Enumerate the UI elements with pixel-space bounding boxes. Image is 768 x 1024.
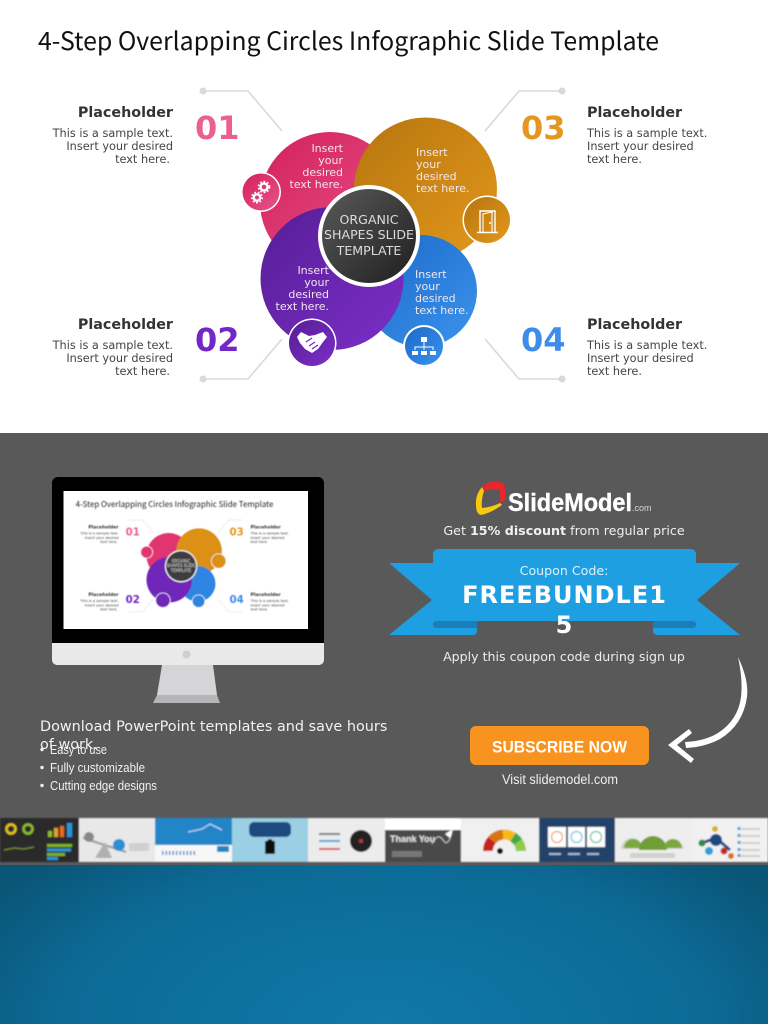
subscribe button bbox=[470, 726, 649, 765]
pink circle text: text here. bbox=[290, 178, 343, 191]
subscribe button: SUBSCRIBE NOW bbox=[492, 738, 628, 756]
thumbnail: thank you: Thank You bbox=[390, 834, 435, 844]
connector lines bbox=[200, 88, 566, 382]
thumbnail: percent cards bbox=[539, 818, 615, 862]
monitor screen slide: text here. bbox=[100, 540, 118, 544]
download heading: Download PowerPoint templates and save hours bbox=[40, 719, 387, 735]
step 01 text block: text here. bbox=[115, 153, 170, 166]
circle: pink bbox=[260, 132, 400, 272]
download heading: of work. bbox=[40, 737, 98, 753]
purple circle text: Insert bbox=[297, 264, 330, 277]
monitor screen slide: This is a sample text. bbox=[79, 599, 119, 603]
step 03 text block: Insert your desired bbox=[587, 140, 694, 153]
feature bullets: Fully customizable bbox=[50, 761, 145, 775]
monitor screen slide: 4-Step Overlapping Circles Infographic Slide Template bbox=[76, 499, 274, 510]
step 01 number: 01 bbox=[195, 109, 240, 147]
gold circle text: desired bbox=[416, 170, 457, 183]
coupon code bbox=[462, 581, 667, 639]
gold circle text: Insert bbox=[416, 146, 448, 159]
monitor screen slide: SHAPES SLIDE bbox=[167, 563, 196, 568]
pink circle text bbox=[290, 142, 344, 191]
monitor chin bbox=[52, 643, 324, 665]
center circle: ORGANIC bbox=[340, 212, 399, 227]
pink circle text: Insert bbox=[311, 142, 344, 155]
title: 4-Step Overlapping Circles Infographic Slide Template bbox=[38, 22, 659, 58]
thumbnail: thank you bbox=[385, 818, 461, 862]
blue circle text: desired bbox=[415, 292, 456, 305]
purple circle text: desired bbox=[288, 288, 329, 301]
blue circle text: Insert bbox=[415, 268, 447, 281]
promo panel background bbox=[0, 433, 768, 865]
monitor screen slide: Placeholder bbox=[88, 592, 119, 598]
monitor screen slide: ORGANIC bbox=[172, 558, 191, 563]
monitor screen slide: 02 bbox=[126, 595, 140, 606]
step 04 text block: This is a sample text. bbox=[586, 339, 707, 352]
monitor mockup bbox=[52, 477, 324, 703]
monitor screen slide: Insert your desired bbox=[85, 536, 119, 540]
monitor screen slide: This is a sample text. bbox=[250, 532, 289, 536]
monitor screen slide: 03 bbox=[229, 527, 244, 538]
template thumbnails strip bbox=[0, 818, 768, 862]
circle: gold bbox=[354, 118, 497, 260]
step 04 text block: Insert your desired bbox=[587, 352, 694, 365]
coupon label: Coupon Code: bbox=[520, 563, 608, 578]
logo: SlideModel bbox=[476, 482, 652, 517]
monitor screen slide: Placeholder bbox=[251, 524, 282, 530]
step 02 text block: Placeholder bbox=[78, 317, 174, 333]
thumbnail: blue report bbox=[155, 818, 232, 862]
blue circle text bbox=[415, 268, 468, 317]
step 01 text block: This is a sample text. bbox=[52, 127, 173, 140]
blue circle text: your bbox=[415, 280, 440, 293]
logo: SlideModel: .com bbox=[632, 503, 652, 513]
step 01 text block bbox=[52, 105, 174, 166]
thumbnail: balance shape bbox=[79, 818, 155, 862]
ribbon folds bbox=[433, 621, 696, 628]
purple circle text: text here. bbox=[276, 300, 329, 313]
feature bullets bbox=[40, 743, 157, 793]
monitor screen slide: This is a sample text. bbox=[250, 599, 289, 603]
center circle: TEMPLATE bbox=[336, 243, 401, 258]
step 04 text block: text here. bbox=[587, 365, 642, 378]
monitor screen slide bbox=[64, 491, 308, 629]
coupon instruction: Apply this coupon code during sign up bbox=[443, 649, 685, 664]
monitor stand bbox=[157, 665, 217, 695]
coupon ribbon bbox=[389, 549, 740, 639]
step 04 text block: Placeholder bbox=[587, 317, 683, 333]
thumbnail: dashboard bbox=[0, 818, 79, 862]
coupon code: FREEBUNDLE1 bbox=[462, 581, 667, 609]
monitor screen bezel bbox=[52, 477, 324, 643]
step 02 text block: Insert your desired bbox=[66, 352, 173, 365]
discount line: Get 15% discount from regular price bbox=[443, 523, 685, 538]
icon: hierarchy bbox=[403, 325, 445, 367]
monitor screen slide: text here. bbox=[100, 607, 118, 611]
step 03 text block: This is a sample text. bbox=[586, 127, 707, 140]
step 04 number: 04 bbox=[521, 321, 566, 359]
circle: purple bbox=[260, 207, 404, 350]
thumbnail: speech bubble bbox=[232, 818, 308, 862]
logo: SlideModel: SlideModel bbox=[508, 489, 632, 517]
gold circle text: your bbox=[416, 158, 441, 171]
monitor screen slide: Placeholder bbox=[251, 592, 282, 598]
overlapping circles diagram bbox=[241, 118, 512, 368]
monitor screen slide: TEMPLATE bbox=[170, 568, 192, 573]
feature bullets: Cutting edge designs bbox=[50, 779, 157, 793]
coupon code: 5 bbox=[556, 611, 573, 639]
circle: blue bbox=[365, 235, 477, 347]
slide preview background bbox=[0, 0, 768, 433]
icon: door bbox=[462, 196, 512, 244]
purple circle text: your bbox=[304, 276, 329, 289]
feature bullets: Easy to use bbox=[50, 743, 107, 757]
teal footer background bbox=[0, 865, 768, 1024]
purple circle text bbox=[276, 264, 330, 313]
blue circle text: text here. bbox=[415, 304, 468, 317]
step 03 text block bbox=[586, 105, 707, 166]
thumbnail: speedometer bbox=[308, 818, 385, 862]
monitor screen slide: text here. bbox=[251, 607, 268, 611]
step 02 number: 02 bbox=[195, 321, 240, 359]
icon: handshake bbox=[288, 318, 336, 368]
monitor screen slide: This is a sample text. bbox=[79, 532, 119, 536]
ribbon right tail bbox=[653, 563, 740, 635]
monitor screen slide: 04 bbox=[229, 595, 244, 606]
center circle bbox=[318, 185, 420, 287]
thumbnail: green gauges bbox=[615, 818, 692, 862]
gold circle text: text here. bbox=[416, 182, 470, 195]
monitor screen slide: 01 bbox=[126, 527, 140, 538]
step 03 number: 03 bbox=[521, 109, 566, 147]
step 01 text block: Insert your desired bbox=[66, 140, 173, 153]
step 04 text block bbox=[586, 317, 707, 378]
step 02 text block bbox=[52, 317, 174, 378]
arrow bbox=[668, 657, 747, 763]
monitor screen slide: Insert your desired bbox=[251, 536, 284, 540]
step 01 text block: Placeholder bbox=[78, 105, 174, 121]
download heading bbox=[40, 719, 387, 753]
monitor screen slide: Insert your desired bbox=[251, 603, 284, 607]
step 03 text block: text here. bbox=[587, 153, 642, 166]
center circle: SHAPES SLIDE bbox=[324, 227, 414, 242]
ribbon left tail bbox=[389, 563, 477, 635]
icon: gears bbox=[241, 172, 281, 212]
thumbnail: gauge bbox=[461, 818, 539, 862]
visit link: Visit slidemodel.com bbox=[502, 772, 618, 787]
step 02 text block: text here. bbox=[115, 365, 170, 378]
step 03 text block: Placeholder bbox=[587, 105, 683, 121]
monitor screen slide: text here. bbox=[251, 540, 268, 544]
thumbnail: molecule diagram bbox=[692, 818, 768, 862]
monitor screen slide: Placeholder bbox=[88, 524, 119, 530]
pink circle text: your bbox=[318, 154, 343, 167]
monitor screen slide: Insert your desired bbox=[85, 603, 119, 607]
pink circle text: desired bbox=[302, 166, 343, 179]
step 02 text block: This is a sample text. bbox=[52, 339, 173, 352]
ribbon main band bbox=[433, 549, 696, 621]
gold circle text bbox=[416, 146, 470, 195]
